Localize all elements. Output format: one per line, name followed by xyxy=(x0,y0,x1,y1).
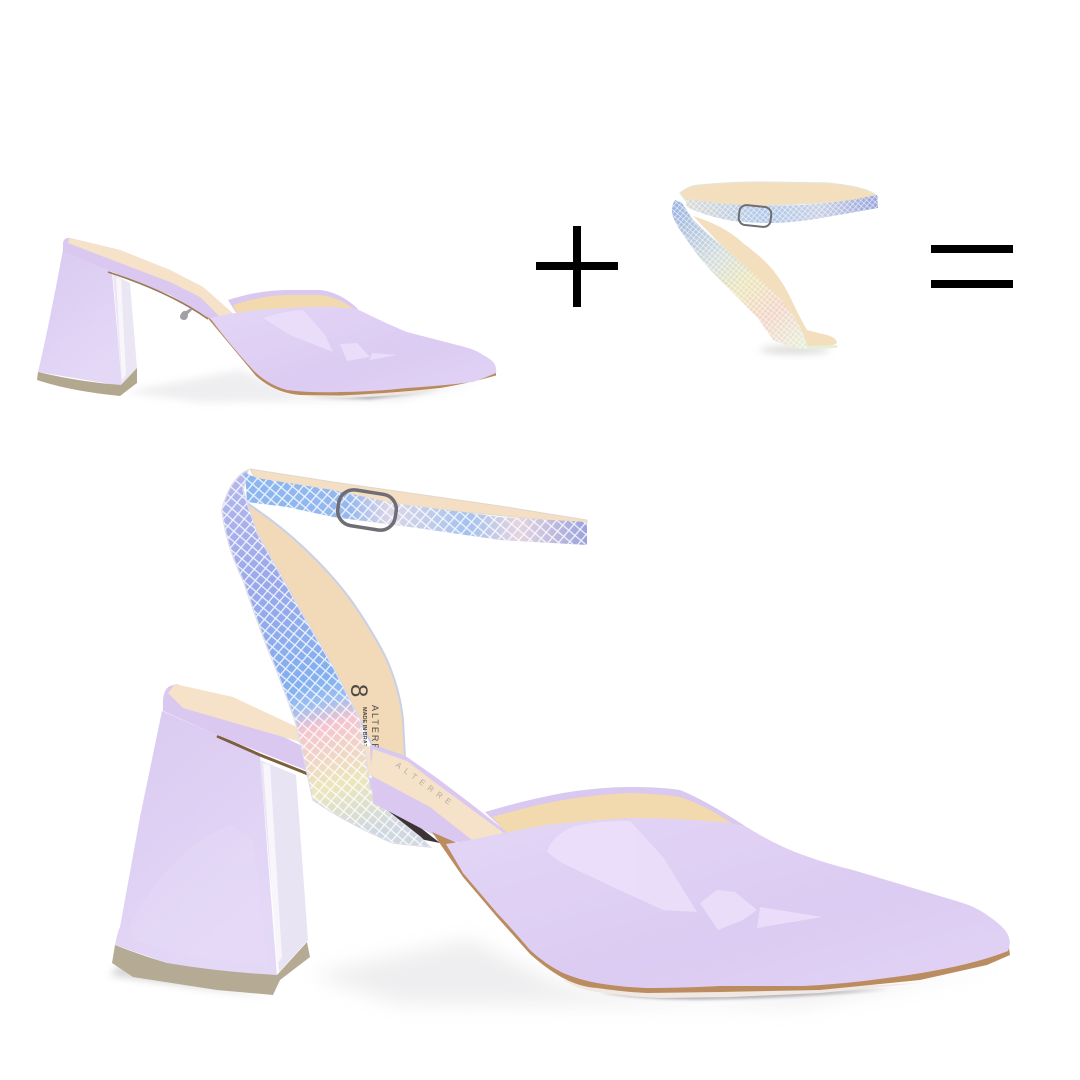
large diagonal band xyxy=(222,470,430,847)
small ankle band xyxy=(685,195,878,223)
large heel seat rim xyxy=(163,684,375,803)
small upper sole edge xyxy=(206,316,496,396)
small strap back lining xyxy=(680,182,878,207)
small shoe shadow xyxy=(125,370,480,402)
size mark on lining xyxy=(345,684,380,760)
large ankle band xyxy=(245,473,587,545)
large strap lining xyxy=(247,503,405,757)
large heel brown edge xyxy=(217,736,375,803)
large highlights xyxy=(547,821,822,930)
large welt xyxy=(563,980,920,998)
dark gap under seat xyxy=(372,802,440,843)
large ankle lining edge xyxy=(250,469,587,524)
small collar xyxy=(228,290,358,316)
insole brand print: ALTERRE xyxy=(394,760,457,810)
small highlights xyxy=(263,310,397,361)
small heel seat xyxy=(63,238,237,319)
small brown edge xyxy=(108,272,208,319)
large vamp lining xyxy=(492,793,733,834)
small strap xyxy=(672,182,878,354)
small metal stud xyxy=(180,308,192,320)
size mark on lining: 8 xyxy=(345,684,372,697)
equals sign xyxy=(931,245,1013,288)
small vamp lining xyxy=(233,295,354,316)
large buckle xyxy=(336,488,398,532)
small insole xyxy=(68,238,237,317)
large heel xyxy=(112,711,310,995)
large collar xyxy=(485,787,745,834)
large insole rear xyxy=(168,684,375,778)
small buckle xyxy=(738,204,772,228)
small welt xyxy=(275,388,440,398)
small upper xyxy=(210,307,496,392)
small strap shadow xyxy=(760,346,830,354)
large seat rim front xyxy=(370,745,508,843)
size mark on lining: MADE IN BRAZIL xyxy=(361,707,367,753)
plus sign xyxy=(536,226,618,307)
large insole front xyxy=(370,749,504,840)
large shoe: combined with strap xyxy=(110,469,1010,1005)
small diagonal band xyxy=(672,200,838,349)
small shoe: lavender mule xyxy=(37,238,496,402)
large upper xyxy=(446,818,1010,988)
small heel xyxy=(37,250,137,396)
small diagonal lining xyxy=(693,216,837,348)
ground shadow xyxy=(110,940,1000,1005)
large sole edge xyxy=(432,832,1010,993)
size mark on lining: ALTERRE xyxy=(370,705,380,760)
